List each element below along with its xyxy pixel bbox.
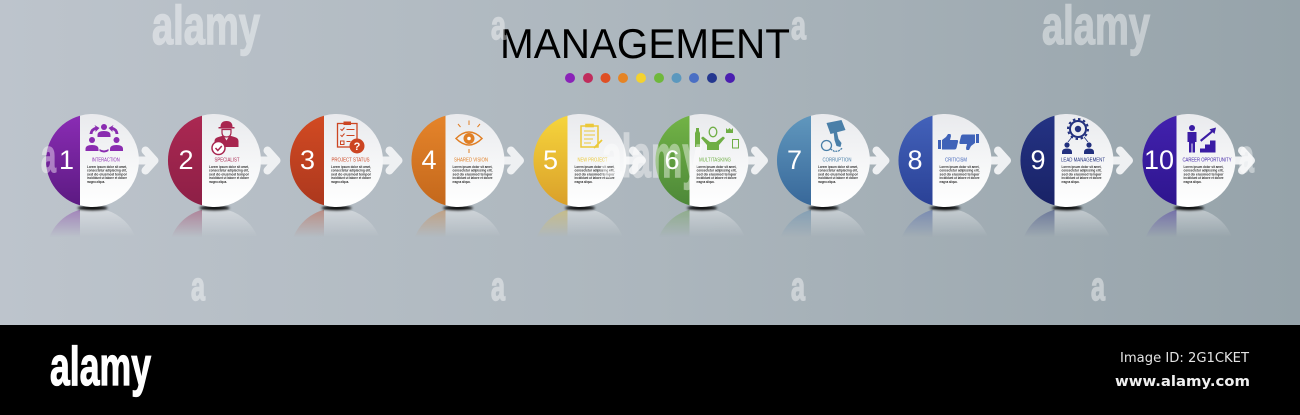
number: 7 bbox=[787, 145, 802, 175]
icon: money and handcuffs bbox=[822, 120, 846, 152]
shadow bbox=[930, 206, 960, 210]
arrow bbox=[615, 150, 642, 170]
body text: Lorem ipsum dolor sit amet, bbox=[696, 164, 736, 169]
label: CAREER OPPORTUNITY bbox=[1182, 158, 1232, 164]
circle white part bbox=[1176, 114, 1235, 207]
step 10: career opportunity bbox=[1142, 114, 1255, 232]
body text: incididunt ut labore et dolore bbox=[87, 175, 128, 180]
arrow bbox=[493, 150, 520, 170]
icon: eye with rays bbox=[456, 120, 482, 153]
circle white part bbox=[202, 114, 261, 207]
background panel bbox=[0, 0, 1300, 325]
number: 3 bbox=[300, 145, 315, 175]
circle coloured part bbox=[655, 116, 690, 205]
arrow bbox=[250, 150, 276, 170]
watermarks: a bbox=[491, 265, 505, 309]
icon: person, stairs and rising arrow bbox=[1188, 125, 1216, 152]
watermarks: a bbox=[191, 265, 205, 309]
body text: Lorem ipsum dolor sit amet, bbox=[574, 164, 614, 169]
number: 9 bbox=[1030, 145, 1046, 175]
body text: sed do eiusmod tempor bbox=[1062, 172, 1102, 176]
step 8: criticism bbox=[898, 114, 1011, 232]
label: MULTITASKING bbox=[699, 158, 731, 164]
icon: specialist with hard hat bbox=[212, 121, 238, 154]
body text: consectetur adipiscing elit, bbox=[574, 168, 614, 173]
number: 5 bbox=[543, 145, 558, 175]
body text: magna aliqua. bbox=[1062, 179, 1080, 184]
number: 10 bbox=[1144, 145, 1174, 175]
body text: sed do eiusmod tempor bbox=[87, 172, 127, 176]
reflection bbox=[296, 209, 374, 234]
body text: consectetur adipiscing elit, bbox=[1062, 168, 1102, 173]
label: NEW PROJECT bbox=[578, 158, 608, 164]
body text: incididunt ut labore et dolore bbox=[696, 175, 737, 180]
body text: sed do eiusmod tempor bbox=[209, 172, 249, 176]
icon: clipboard with question mark: ? bbox=[354, 141, 361, 153]
body text: sed do eiusmod tempor bbox=[940, 172, 980, 176]
website: www.alamy.com bbox=[1115, 374, 1250, 390]
shadow bbox=[200, 206, 230, 210]
circle coloured part bbox=[898, 116, 932, 205]
watermarks: a bbox=[1239, 130, 1254, 182]
step 5: new project bbox=[533, 114, 646, 233]
number: 1 bbox=[59, 145, 74, 175]
circle coloured part bbox=[1142, 116, 1176, 205]
body text: consectetur adipiscing elit, bbox=[940, 168, 980, 173]
circle coloured part bbox=[290, 116, 324, 205]
arrow bbox=[737, 150, 764, 170]
circle white part bbox=[446, 114, 504, 207]
circle white part bbox=[932, 114, 991, 207]
number: 8 bbox=[907, 145, 923, 175]
step 3: project status bbox=[290, 114, 402, 234]
body text: consectetur adipiscing elit, bbox=[1184, 168, 1224, 173]
body text: consectetur adipiscing elit, bbox=[209, 168, 249, 173]
body text: Lorem ipsum dolor sit amet, bbox=[818, 164, 858, 169]
label: INTERACTION bbox=[92, 158, 120, 164]
body text: magna aliqua. bbox=[574, 179, 592, 184]
circle white part bbox=[324, 114, 383, 207]
circle white part bbox=[811, 114, 870, 207]
body text: incididunt ut labore et dolore bbox=[818, 175, 859, 180]
circle coloured part bbox=[46, 116, 80, 205]
body text: incididunt ut labore et dolore bbox=[1062, 175, 1102, 180]
colour dots row bbox=[565, 73, 735, 83]
reflection bbox=[1148, 209, 1228, 232]
body text: incididunt ut labore et dolore bbox=[452, 175, 493, 180]
reflection bbox=[417, 209, 496, 233]
circle coloured part bbox=[1020, 116, 1054, 205]
shadow bbox=[808, 206, 838, 210]
number: 6 bbox=[664, 145, 680, 175]
shadow bbox=[1174, 206, 1204, 210]
circle white part bbox=[690, 114, 748, 207]
icon: gear and two people bbox=[1062, 119, 1094, 154]
shadow bbox=[322, 206, 352, 210]
watermarks: a bbox=[41, 130, 56, 182]
body text: incididunt ut labore et dolore bbox=[331, 175, 372, 180]
body text: sed do eiusmod tempor bbox=[696, 172, 737, 176]
shadow bbox=[443, 206, 473, 210]
body text: incididunt ut labore et dolore bbox=[940, 175, 980, 180]
label: CORRUPTION bbox=[822, 158, 852, 164]
watermarks: a bbox=[791, 265, 805, 309]
watermarks bbox=[41, 0, 1254, 309]
body text bbox=[331, 164, 372, 184]
body text: magna aliqua. bbox=[1184, 179, 1202, 184]
arrow bbox=[128, 150, 154, 170]
body text: consectetur adipiscing elit, bbox=[452, 168, 492, 173]
shadow bbox=[565, 206, 595, 210]
label: LEAD MANAGEMENT bbox=[1061, 158, 1105, 164]
step 7: corruption bbox=[777, 114, 890, 230]
body text: magna aliqua. bbox=[452, 179, 470, 184]
circle coloured part bbox=[168, 116, 202, 205]
footer bar bbox=[0, 325, 1300, 415]
reflection bbox=[784, 209, 862, 230]
arrow bbox=[980, 150, 1007, 170]
circle white part bbox=[80, 114, 139, 207]
circle coloured part bbox=[777, 116, 811, 205]
arrow bbox=[1102, 150, 1129, 170]
body text: consectetur adipiscing elit, bbox=[696, 168, 736, 173]
watermarks: a bbox=[491, 4, 507, 48]
body text: magna aliqua. bbox=[87, 179, 105, 184]
body text: Lorem ipsum dolor sit amet, bbox=[1062, 164, 1102, 169]
body text: magna aliqua. bbox=[696, 179, 714, 184]
circle white part bbox=[568, 114, 626, 207]
step 6: multitasking bbox=[656, 114, 768, 232]
icon: clipboard with pencil bbox=[581, 124, 602, 148]
title: MANAGEMENT bbox=[500, 20, 790, 67]
image id: Image ID: 2G1CKET bbox=[1120, 351, 1249, 366]
circle coloured part bbox=[533, 116, 568, 205]
body text bbox=[1062, 164, 1102, 184]
reflection bbox=[662, 209, 740, 232]
body text: magna aliqua. bbox=[818, 179, 836, 184]
reflection bbox=[905, 209, 984, 232]
arrow bbox=[1224, 150, 1251, 170]
body text: Lorem ipsum dolor sit amet, bbox=[331, 164, 371, 169]
body text: magna aliqua. bbox=[209, 179, 227, 184]
step 9: lead management bbox=[1020, 114, 1133, 232]
shadow bbox=[78, 206, 108, 210]
circle coloured part bbox=[411, 116, 446, 205]
label: SHARED VISION bbox=[454, 158, 488, 164]
icon: interaction people bbox=[86, 124, 123, 152]
step 4: shared vision bbox=[411, 114, 524, 233]
body text: incididunt ut labore et dolore bbox=[209, 175, 250, 180]
body text: consectetur adipiscing elit, bbox=[818, 168, 858, 173]
reflection bbox=[539, 209, 618, 233]
number: 4 bbox=[421, 145, 437, 175]
body text: consectetur adipiscing elit, bbox=[87, 168, 127, 173]
body text: incididunt ut labore et dolore bbox=[1184, 175, 1224, 180]
shadow bbox=[1052, 206, 1082, 210]
body text: sed do eiusmod tempor bbox=[574, 172, 615, 176]
body text bbox=[1184, 164, 1224, 184]
body text: Lorem ipsum dolor sit amet, bbox=[209, 164, 249, 169]
body text: Lorem ipsum dolor sit amet, bbox=[940, 164, 980, 169]
body text bbox=[87, 164, 128, 184]
label: PROJECT STATUS bbox=[332, 158, 370, 164]
body text: sed do eiusmod tempor bbox=[1184, 172, 1224, 176]
label: SPECIALIST bbox=[214, 158, 240, 164]
footer logo: alamy bbox=[50, 335, 151, 397]
body text: magna aliqua. bbox=[331, 179, 349, 184]
body text bbox=[940, 164, 980, 184]
body text bbox=[209, 164, 250, 184]
label: CRITICISM bbox=[945, 158, 967, 164]
arrow bbox=[858, 150, 886, 170]
icon: thumbs up and thumbs down bbox=[938, 134, 979, 150]
body text: sed do eiusmod tempor bbox=[818, 172, 858, 176]
body text: Lorem ipsum dolor sit amet, bbox=[452, 164, 492, 169]
watermarks: a bbox=[1091, 265, 1105, 309]
body text: consectetur adipiscing elit, bbox=[331, 168, 371, 173]
body text: incididunt ut labore et dolore bbox=[574, 175, 615, 180]
shadow bbox=[687, 206, 717, 210]
body text: magna aliqua. bbox=[940, 179, 958, 184]
body text bbox=[818, 164, 859, 184]
body text bbox=[452, 164, 493, 184]
watermarks: a bbox=[791, 4, 807, 48]
step 1: interaction bbox=[46, 114, 158, 233]
reflection bbox=[52, 209, 130, 233]
number: 2 bbox=[178, 145, 194, 175]
body text: sed do eiusmod tempor bbox=[452, 172, 493, 176]
arrow bbox=[372, 150, 398, 170]
body text bbox=[696, 164, 737, 184]
icon: multitasking person bbox=[695, 127, 738, 150]
body text bbox=[574, 164, 615, 184]
step 2: specialist bbox=[168, 114, 280, 233]
body text: Lorem ipsum dolor sit amet, bbox=[1184, 164, 1224, 169]
icon: clipboard with question mark bbox=[338, 122, 364, 154]
body text: Lorem ipsum dolor sit amet, bbox=[87, 164, 127, 169]
reflection bbox=[174, 209, 252, 233]
reflection bbox=[1026, 208, 1106, 232]
body text: sed do eiusmod tempor bbox=[331, 172, 371, 176]
circle white part bbox=[1054, 114, 1113, 207]
watermarks: alamy bbox=[602, 123, 702, 190]
